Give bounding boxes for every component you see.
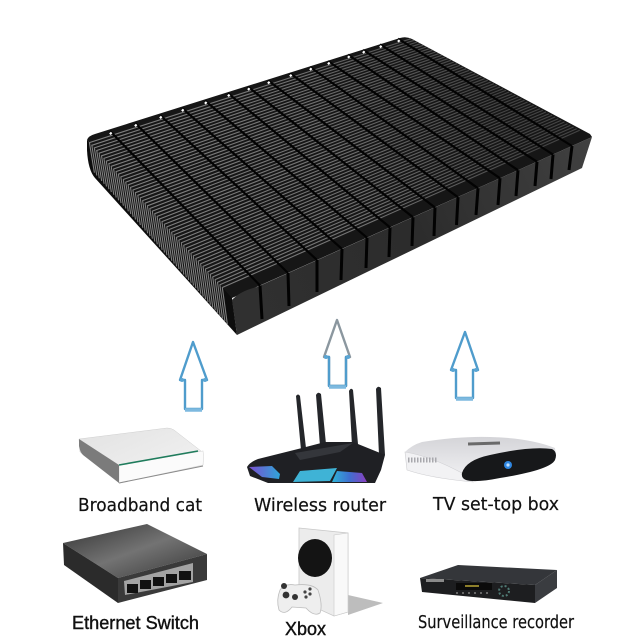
floor shadow: [348, 595, 383, 615]
label: wireless router: Wireless router: [254, 496, 387, 516]
notches on the back edge: [110, 40, 400, 134]
left side ribs base: [87, 140, 237, 335]
controller: [278, 585, 321, 614]
label: surveillance recorder: Surveillance recorder: [418, 613, 575, 633]
icon: surveillance recorder: [420, 565, 557, 603]
arrows pointing up to the enclosure: [180, 320, 478, 410]
arrow: left: [180, 342, 207, 410]
label: tv set-top box: TV set-top box: [432, 495, 559, 515]
icon: xbox console and controller: [278, 528, 383, 616]
icon: broadband cat: [79, 428, 204, 483]
front face groove slots: [260, 146, 572, 319]
front face: [232, 137, 592, 335]
top face: [87, 37, 592, 298]
heat sink enclosure: [87, 37, 592, 335]
long grooves across the top: [110, 39, 572, 286]
label: xbox: Xbox: [285, 619, 326, 639]
ethernet ports: [127, 571, 191, 593]
cooling fin lines: [89, 39, 580, 324]
console tower: [299, 528, 348, 616]
label: ethernet switch: Ethernet Switch: [72, 613, 199, 633]
arrow: middle: [324, 320, 350, 387]
label: broadband cat: Broadband cat: [78, 496, 202, 516]
arrow: right: [451, 332, 478, 399]
icon: wireless router: [247, 387, 385, 483]
icon: tv set-top box: [405, 437, 556, 482]
icon: ethernet switch: [63, 524, 207, 603]
antennas: [296, 387, 385, 455]
